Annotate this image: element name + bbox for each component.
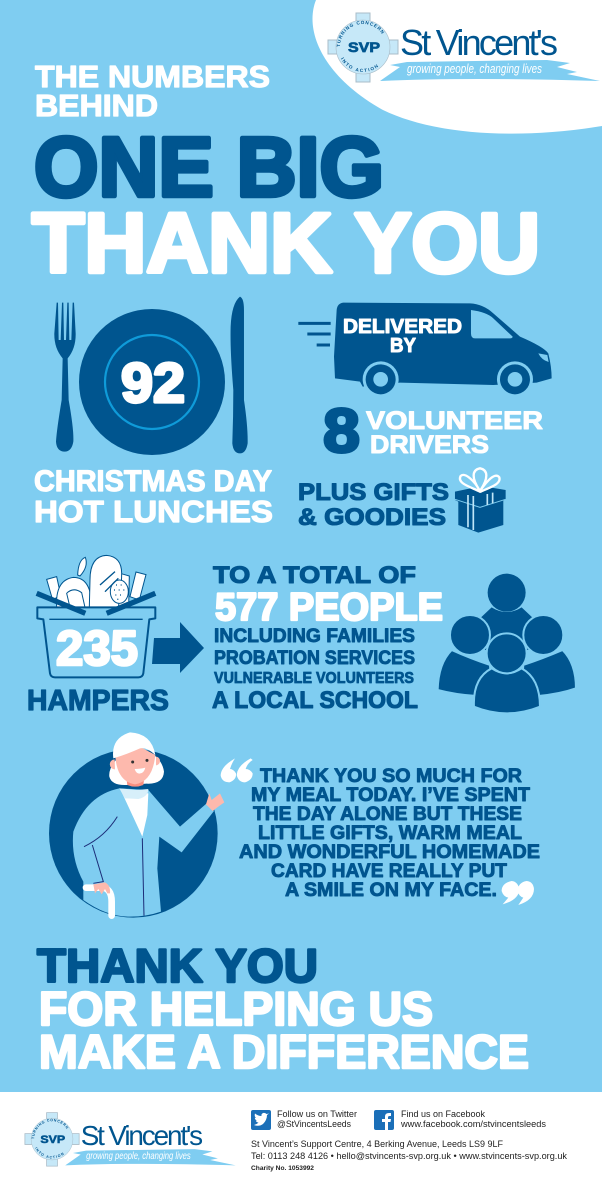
- text: to a total of 577 people: 577 PEOPLE: [215, 586, 443, 629]
- woman raised hand: [206, 793, 224, 811]
- logo brush strapline: growing people, changing lives: [407, 61, 542, 76]
- van label: [343, 316, 462, 357]
- hamper seeds: [114, 585, 124, 599]
- caption: plus gifts and goodies: PLUS GIFTS: [298, 479, 449, 506]
- text: to a total of 577 people: A LOCAL SCHOOL: [212, 687, 418, 714]
- caption: hampers: HAMPERS: [27, 685, 169, 717]
- arrow: [152, 622, 204, 673]
- woman shirt: [121, 790, 148, 837]
- caption: christmas day hot lunches: CHRISTMAS DAY: [34, 465, 272, 498]
- woman neck: [127, 780, 144, 787]
- heading: the numbers behind: [35, 59, 270, 123]
- footer panel: [0, 1092, 602, 1186]
- text: to a total of 577 people: VULNERABLE VOLUNTEERS: [214, 670, 414, 687]
- hamper basket outline: [37, 607, 155, 677]
- text: twitter: @StVincentsLeeds: [277, 1119, 351, 1129]
- quote text: A SMILE ON MY FACE.: [285, 879, 497, 901]
- footer logo strapline: growing people, changing lives: [86, 1151, 191, 1162]
- panel: christmas lunches: [34, 297, 273, 529]
- text: facebook: www.facebook.com/stvincentsleeds: [400, 1119, 546, 1129]
- woman hand on cane: [93, 882, 110, 894]
- quote text: THANK YOU SO MUCH FOR: [260, 765, 522, 787]
- quote text: CARD HAVE REALLY PUT: [271, 860, 507, 882]
- footer logo cross: INTO ACTION: [35, 1147, 64, 1158]
- panel: testimonial: [49, 732, 540, 918]
- icon: opening quote mark: [221, 758, 253, 782]
- text: facebook: Find us on Facebook: [401, 1109, 485, 1119]
- logo: St Vincent's footer: [24, 1112, 236, 1166]
- hamper details: [100, 572, 118, 592]
- footer logo wordmark: St Vincent's: [81, 1120, 203, 1151]
- number 92: 92: [121, 351, 185, 414]
- icon: plate: [79, 309, 225, 455]
- quote text: THE DAY ALONE BUT THESE: [253, 803, 522, 825]
- woman collar: [119, 788, 148, 799]
- text: to a total of 577 people: PROBATION SERVICES: [214, 647, 415, 669]
- footer logo strapline: [65, 1149, 236, 1165]
- caption: plus gifts and goodies: [298, 479, 449, 531]
- icon: group of people: [438, 574, 576, 713]
- text: to a total of 577 people: INCLUDING FAMILIES: [214, 625, 415, 647]
- footer logo cross: [24, 1112, 80, 1166]
- text: facebook: [400, 1109, 546, 1129]
- closing message: THANK YOU: [37, 939, 318, 992]
- footer logo cross: TURNING CONCERN: [32, 1118, 68, 1139]
- caption: volunteer drivers: DRIVERS: [370, 431, 489, 459]
- woman eyes: [131, 760, 134, 763]
- woman hair top: [113, 732, 155, 758]
- closing message: [37, 939, 529, 1078]
- caption: volunteer drivers: [366, 407, 543, 459]
- woman face: [115, 745, 155, 784]
- caption: plus gifts and goodies: & GOODIES: [298, 504, 446, 531]
- caption: christmas day hot lunches: HOT LUNCHES: [34, 494, 273, 529]
- icon: hamper basket: [37, 555, 155, 677]
- text: twitter: Follow us on Twitter: [277, 1109, 357, 1119]
- icon: closing quote mark: [502, 881, 534, 905]
- logo cross: TURNING CONCERN: [336, 20, 384, 47]
- text: contact details: St Vincent’s Support Centre, 4 Berking Avenue, Leeds LS9 9LF: [251, 1139, 503, 1149]
- woman hair back: [109, 755, 164, 785]
- closing message: FOR HELPING US: [39, 982, 433, 1035]
- woman coat lines: [84, 817, 144, 916]
- heading: one big: ONE BIG: [34, 120, 384, 214]
- woman cane: [86, 888, 112, 916]
- header white curved panel: [312, 0, 602, 134]
- logo brush strapline: [380, 60, 600, 81]
- logo cross: [328, 12, 398, 82]
- text: to a total of 577 people: TO A TOTAL OF: [213, 562, 416, 589]
- icon: knife: [231, 297, 248, 453]
- quote text: LITTLE GIFTS, WARM MEAL: [258, 822, 522, 844]
- heading: the numbers behind: THE NUMBERS: [35, 59, 270, 94]
- caption: volunteer drivers: VOLUNTEER: [366, 407, 543, 435]
- illustration: elderly woman in circle: [49, 732, 224, 918]
- text: contact details: Tel: 0113 248 4126 • hello@stvincents-svp.org.uk • www.stvincents-svp.org.uk: [251, 1151, 568, 1161]
- panel: people reached: [212, 562, 576, 714]
- caption: christmas day hot lunches: [34, 465, 273, 529]
- logo wordmark: St Vincent's: [400, 22, 558, 63]
- icon: facebook: [374, 1110, 394, 1130]
- footer logo cross: SVP: [40, 1134, 65, 1146]
- hamper food: [47, 555, 146, 607]
- woman ears: [110, 757, 160, 769]
- icon: fork: [54, 303, 76, 452]
- van label: BY: [390, 335, 417, 357]
- text: twitter: [277, 1109, 357, 1129]
- logo cross: INTO ACTION: [341, 57, 378, 72]
- closing message: MAKE A DIFFERENCE: [39, 1025, 529, 1078]
- number 8: 8: [323, 397, 360, 466]
- panel: delivery van: [298, 303, 552, 533]
- quote text: [239, 765, 540, 901]
- icon: twitter: [251, 1110, 271, 1130]
- number 235: 235: [56, 622, 138, 676]
- text: contact details: [251, 1139, 568, 1172]
- woman coat: [73, 788, 214, 917]
- logo cross: SVP: [348, 39, 380, 55]
- panel: hampers: [27, 555, 204, 717]
- text: contact details: Charity No. 1053992: [251, 1166, 315, 1172]
- text: to a total of 577 people: [212, 562, 443, 714]
- quote text: AND WONDERFUL HOMEMADE: [239, 841, 540, 863]
- logo: St Vincent's header: [328, 12, 600, 82]
- heading: the numbers behind: BEHIND: [35, 88, 158, 123]
- van label: DELIVERED: [343, 316, 462, 338]
- icon: van: [298, 303, 552, 397]
- heading: thank you: THANK YOU: [32, 196, 540, 290]
- woman smile: [135, 768, 145, 774]
- icon: gift box: [455, 468, 506, 533]
- quote text: MY MEAL TODAY. I’VE SPENT: [251, 784, 530, 806]
